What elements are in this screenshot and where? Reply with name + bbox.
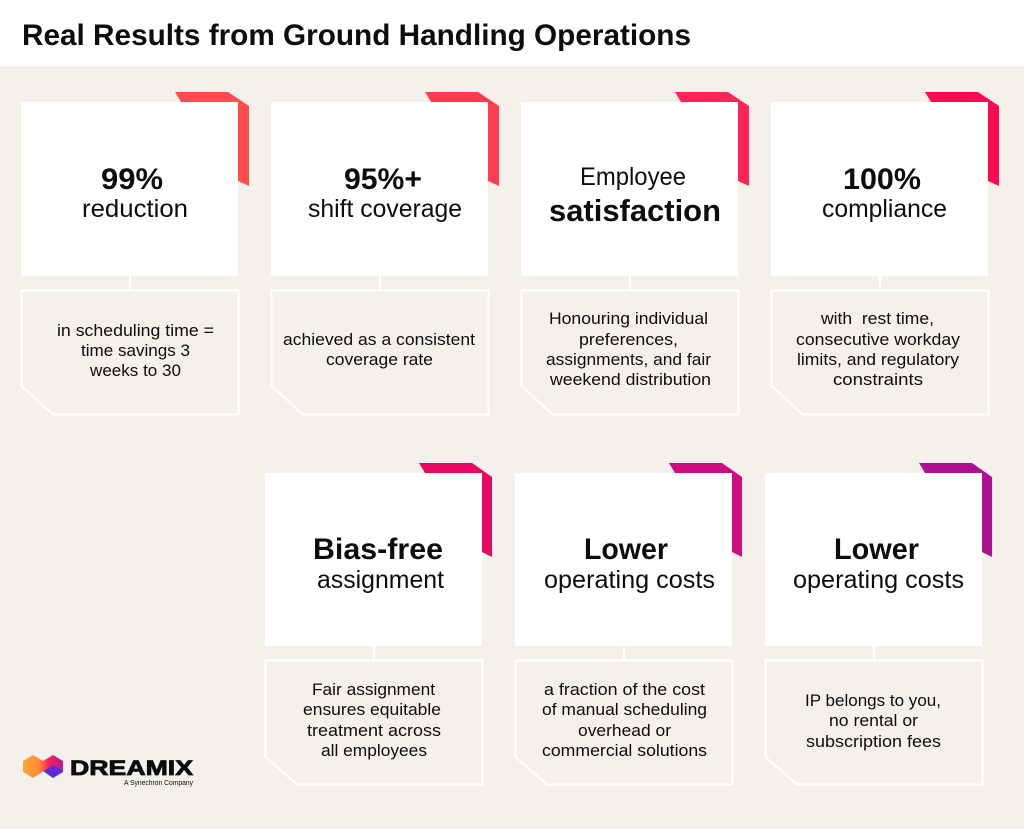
panel: bias-free assignment: Fair assignment: [312, 680, 435, 699]
panel: lower operating costs, fraction of cost: overhead or: [578, 721, 671, 740]
logo: Dreamix: [23, 755, 193, 787]
panel: 100% compliance: 100%: [843, 163, 921, 196]
panel: lower operating costs, fraction of cost: of manual scheduling: [542, 700, 707, 719]
panel: 99% reduction: reduction: [82, 195, 188, 223]
panel: lower operating costs, IP ownership: Lower: [834, 533, 919, 566]
panel: 100% compliance: [771, 92, 999, 414]
panel: bias-free assignment: Bias-free: [313, 533, 443, 566]
panel: bias-free assignment: treatment across: [307, 721, 441, 740]
panel: bias-free assignment: ensures equitable: [303, 700, 441, 719]
panel: employee satisfaction: Employee: [580, 163, 686, 191]
panel: employee satisfaction: assignments, and fair: [546, 350, 711, 369]
logo: Dreamix: DREAMIX: [70, 757, 193, 780]
logo: Dreamix: A Synechron Company: [124, 780, 193, 787]
panel: 95%+ shift coverage: [271, 92, 499, 414]
panel: 100% compliance: limits, and regulatory: [797, 350, 960, 369]
panel: 99% reduction: [21, 92, 249, 414]
panel: lower operating costs, IP ownership: IP belongs to you,: [805, 691, 941, 710]
panel: 99% reduction: time savings 3: [81, 341, 190, 360]
title: Real Results from Ground Handling Operations: [22, 19, 691, 52]
panel: lower operating costs, fraction of cost: operating costs: [544, 566, 715, 594]
panel: employee satisfaction: [521, 92, 749, 414]
panel: employee satisfaction: satisfaction: [549, 193, 721, 228]
panel: lower operating costs, fraction of cost: [515, 463, 742, 784]
panel: lower operating costs, fraction of cost: a fraction of the cost: [544, 680, 705, 699]
panel: bias-free assignment: [265, 463, 492, 784]
panel: lower operating costs, IP ownership: no rental or: [829, 711, 918, 730]
panel: 99% reduction: weeks to 30: [89, 361, 181, 380]
header band: [0, 0, 1024, 66]
panel: lower operating costs, IP ownership: subscription fees: [806, 732, 941, 751]
panel: 95%+ shift coverage: achieved as a consistent: [283, 330, 475, 349]
panel: 100% compliance: consecutive workday: [796, 330, 961, 349]
panel: lower operating costs, IP ownership: [765, 463, 992, 784]
panel: 95%+ shift coverage: coverage rate: [326, 350, 433, 369]
panel: employee satisfaction: preferences,: [579, 330, 678, 349]
panel: 99% reduction: in scheduling time =: [57, 321, 214, 340]
panel: lower operating costs, fraction of cost: commercial solutions: [542, 741, 707, 760]
panel: 100% compliance: with rest time,: [820, 309, 934, 328]
panel: lower operating costs, fraction of cost: Lower: [584, 533, 668, 566]
panel: bias-free assignment: all employees: [321, 741, 427, 760]
panel: 100% compliance: constraints: [833, 370, 923, 389]
panel: lower operating costs, IP ownership: operating costs: [793, 566, 964, 594]
panel: employee satisfaction: weekend distribution: [549, 370, 711, 389]
panel: 99% reduction: 99%: [101, 163, 163, 196]
panel: bias-free assignment: assignment: [317, 566, 444, 594]
panel: 95%+ shift coverage: shift coverage: [308, 195, 462, 223]
panel: employee satisfaction: Honouring individual: [549, 309, 708, 328]
panel: 95%+ shift coverage: 95%+: [344, 163, 422, 196]
panel: 100% compliance: compliance: [822, 195, 947, 223]
